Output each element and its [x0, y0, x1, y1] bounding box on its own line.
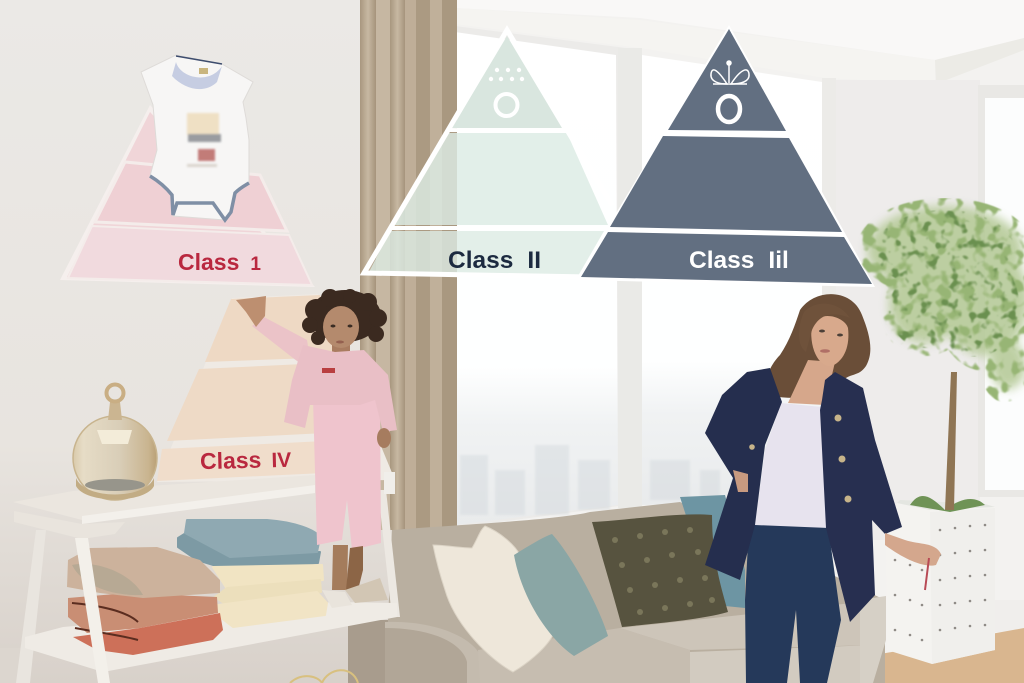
stacked towels	[67, 520, 327, 655]
icon: ring	[496, 94, 518, 116]
towel: clay	[68, 593, 218, 633]
lower shelf	[25, 602, 397, 672]
towel: cream bottom	[218, 592, 327, 627]
arm	[252, 317, 312, 372]
icon: sprout	[711, 61, 749, 84]
label: Class II: Class II	[448, 247, 541, 274]
trousers	[313, 398, 381, 550]
buttons	[749, 414, 852, 502]
leaves light	[857, 198, 1024, 402]
other hand	[377, 428, 391, 448]
top shelf	[13, 475, 315, 520]
coat left side	[705, 368, 782, 580]
towel: blue lower	[178, 533, 320, 571]
child eyes and mouth	[330, 324, 352, 344]
label: Class 1: Class 1	[178, 249, 261, 275]
face	[811, 316, 848, 366]
pillow: teal back	[680, 495, 745, 608]
icon: dots	[489, 68, 524, 81]
jacket	[284, 345, 397, 432]
icon: ring	[718, 96, 740, 122]
glass jar	[73, 384, 157, 500]
pillow: cream	[433, 526, 553, 672]
towel: blue top	[185, 520, 320, 557]
pyramid: Class IV	[157, 294, 395, 482]
curtain	[360, 0, 457, 530]
sleeve hand	[733, 470, 748, 492]
pyramid: Class III	[576, 25, 875, 287]
pyramid: Class II	[364, 30, 612, 277]
shelf front leg	[75, 538, 110, 683]
hair	[302, 289, 387, 345]
right leg	[378, 490, 400, 617]
label: Class IV: Class IV	[200, 446, 292, 474]
white top	[755, 403, 829, 528]
distant city blocks	[460, 445, 720, 515]
towel: terracotta	[73, 613, 223, 655]
plant trunk	[945, 372, 957, 510]
pillow: blue	[514, 534, 608, 656]
onesie	[141, 55, 253, 220]
towel: beige	[67, 547, 220, 598]
plant planter	[886, 496, 995, 664]
pyramid: Class 1	[60, 105, 315, 287]
neck	[332, 340, 350, 354]
hair	[767, 294, 870, 398]
window panes	[455, 26, 1024, 528]
leaves dark	[875, 210, 1019, 357]
child	[236, 289, 397, 608]
face	[323, 306, 359, 348]
soft canopy	[867, 206, 1024, 389]
hand	[236, 296, 266, 327]
woman	[705, 294, 941, 683]
right hand	[885, 533, 941, 566]
shelf unit	[13, 472, 400, 683]
coat right side	[820, 372, 902, 622]
label: Class III: Class Iil	[689, 247, 789, 274]
towel: cream top	[213, 565, 323, 589]
neck	[788, 360, 835, 405]
towel: cream middle	[215, 580, 321, 605]
back left leg	[16, 530, 46, 683]
pillow: patterned	[592, 514, 728, 627]
woman eyes and mouth	[819, 330, 843, 353]
pillows	[433, 495, 745, 672]
plant foliage	[857, 198, 1024, 402]
floor basket handle	[290, 670, 358, 683]
shoes	[332, 545, 348, 590]
jeans	[745, 525, 841, 683]
sofa	[348, 502, 886, 683]
